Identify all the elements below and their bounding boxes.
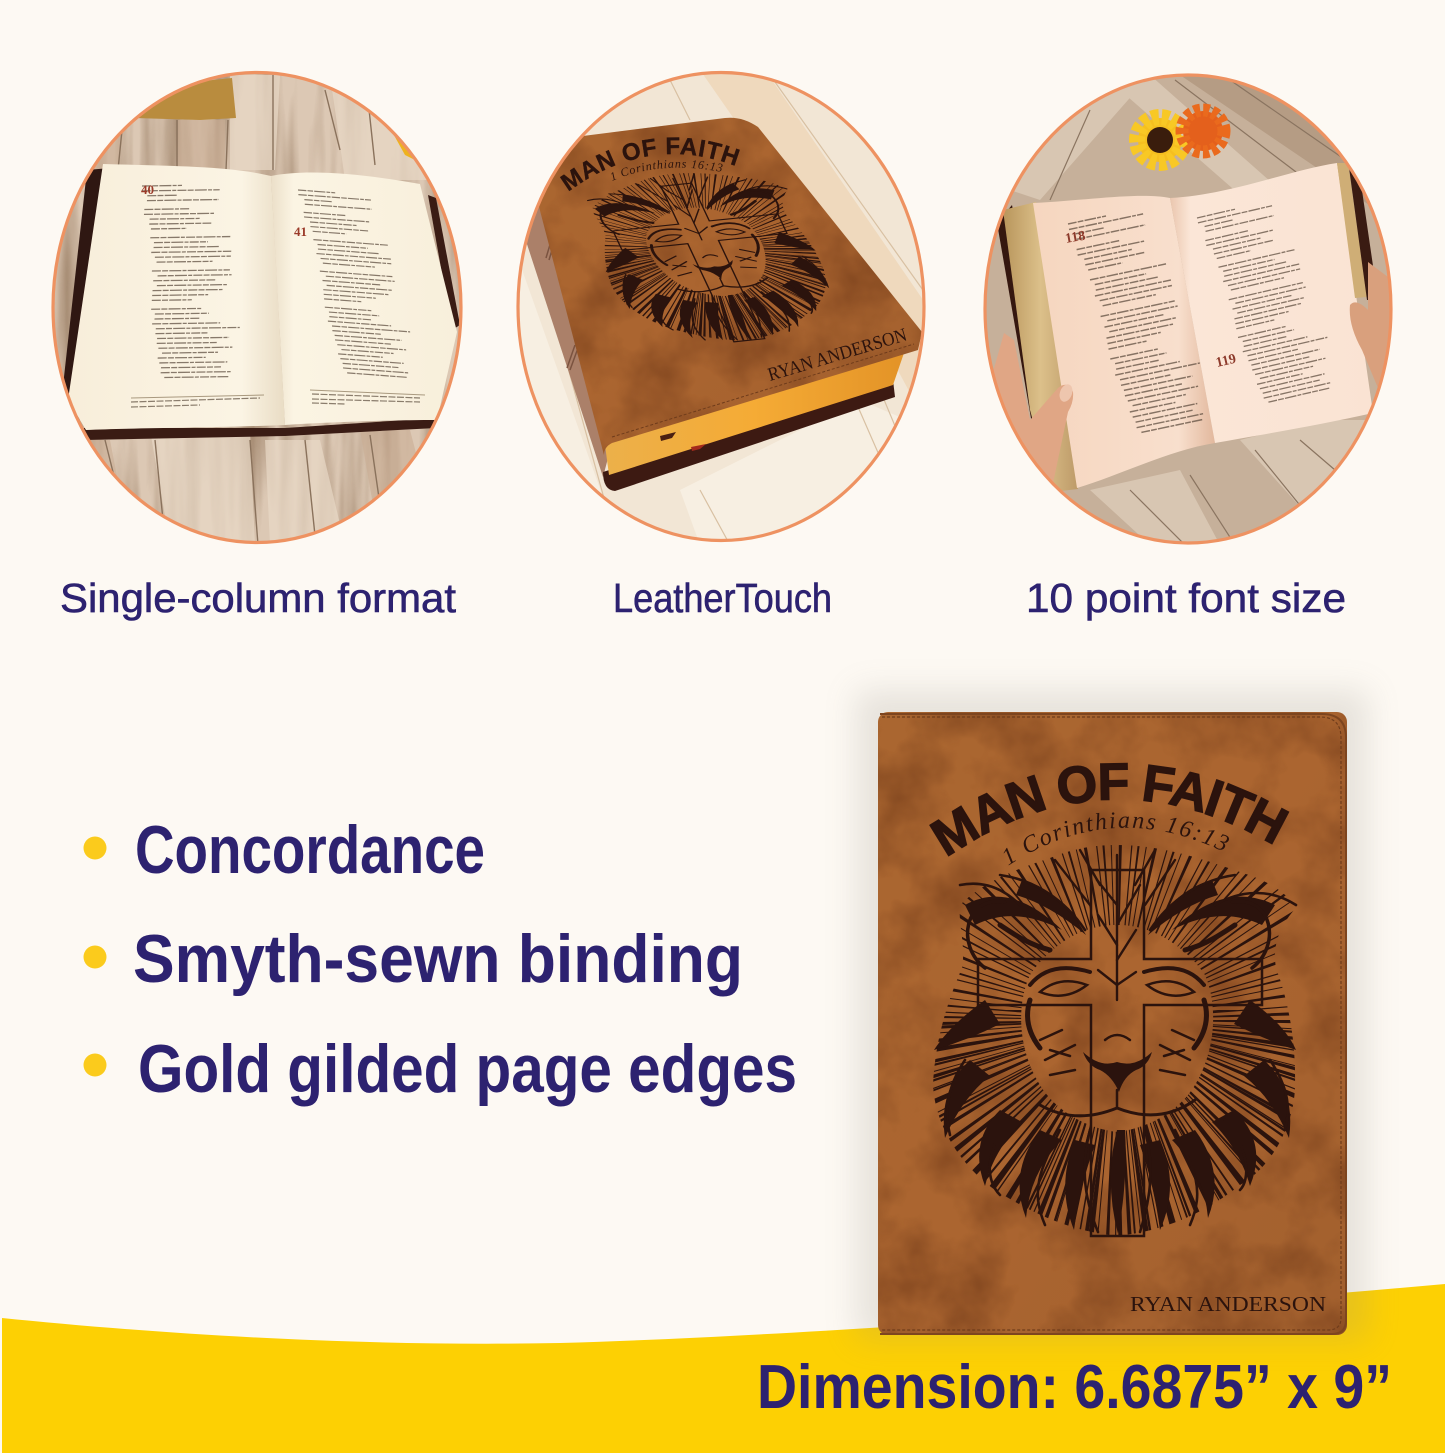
engraved title: MAN OF FAITH xyxy=(929,762,1290,856)
bullet list xyxy=(84,812,797,1107)
yellow wave band xyxy=(2,1284,1445,1453)
left page xyxy=(1033,196,1215,488)
orange flower xyxy=(1182,110,1224,152)
photo circle: 10 point open Bible in hands: 119 xyxy=(1215,352,1238,371)
left page xyxy=(68,164,285,430)
circle outline xyxy=(53,72,461,542)
bullet: binding: Smyth-sewn binding xyxy=(133,921,743,997)
engraved lion xyxy=(587,173,830,342)
photo circle: LeatherTouch cover: 1 Corinthians 16:13 xyxy=(611,160,723,181)
spine xyxy=(524,203,612,477)
caption: single-column format: Single-column format xyxy=(60,575,457,621)
engraved name: RYAN ANDERSON xyxy=(1130,1292,1326,1316)
large book cover xyxy=(850,684,1374,1346)
page text xyxy=(142,184,240,378)
caption: 10 point font size: 10 point font size xyxy=(1026,575,1346,621)
gilded pages xyxy=(605,350,905,475)
bullet: page edges: Gold gilded page edges xyxy=(138,1031,797,1107)
photo circle: 10 point open Bible in hands: 118 xyxy=(1064,229,1087,247)
engraved title: MAN OF FAITH xyxy=(560,137,740,191)
gilded edge left xyxy=(1003,202,1078,492)
right page xyxy=(271,172,457,425)
bottom cover xyxy=(603,380,895,491)
burlap xyxy=(130,78,236,120)
engraved verse: 1 Corinthians 16:13 xyxy=(1004,812,1229,866)
flower at edge xyxy=(394,136,414,160)
page text xyxy=(1068,213,1204,434)
bullet: concordance: Concordance xyxy=(135,812,485,888)
circle outline xyxy=(518,72,924,540)
left hand xyxy=(993,333,1073,488)
right page xyxy=(1170,163,1373,443)
sunflower xyxy=(1137,117,1183,163)
photo circle: LeatherTouch cover xyxy=(516,70,926,542)
cover xyxy=(505,118,922,455)
engraved name: RYAN ANDERSON xyxy=(765,324,910,386)
photo circle: single-column open Bible xyxy=(50,70,465,545)
photo circle: single-column open Bible: 40 xyxy=(141,182,154,197)
photo circle: 10 point open Bible in hands xyxy=(980,70,1395,550)
right gold edge xyxy=(1337,163,1367,298)
caption: LeatherTouch: LeatherTouch xyxy=(613,575,832,621)
engraved lion and cross xyxy=(934,850,1296,1236)
dark cover xyxy=(998,205,1032,419)
right hand xyxy=(1350,262,1390,387)
circle outline xyxy=(985,75,1391,543)
dark cover xyxy=(64,168,102,420)
photo circle: single-column open Bible: 41 xyxy=(294,224,307,239)
